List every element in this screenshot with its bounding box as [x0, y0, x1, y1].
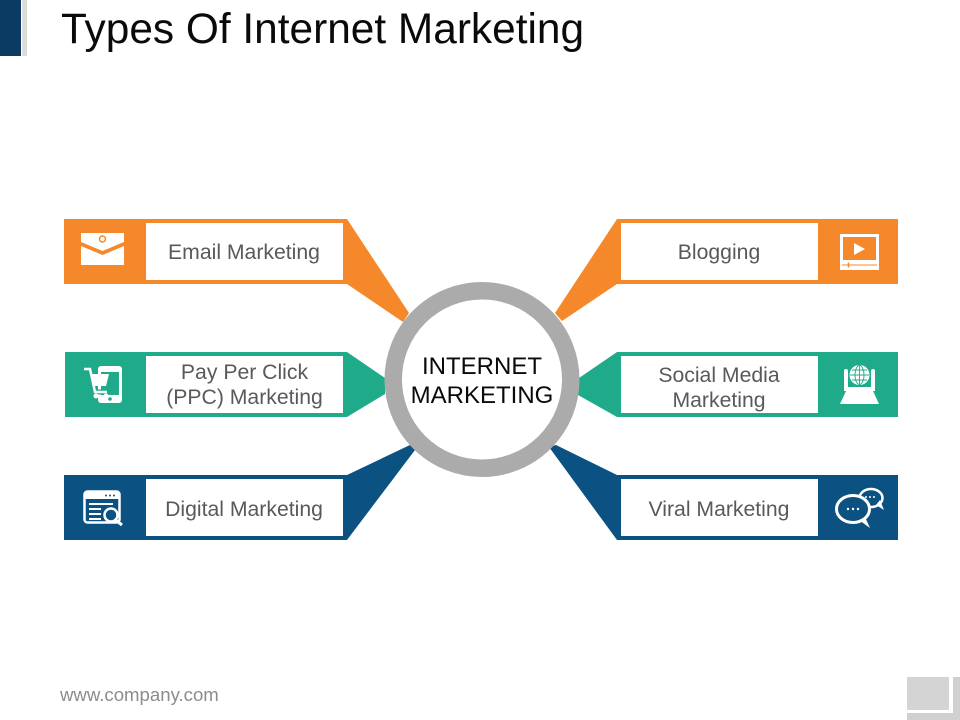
label: email marketing: Email Marketing — [168, 241, 320, 264]
label: digital marketing: Digital Marketing — [165, 498, 323, 521]
central circle: MARKETING — [411, 382, 553, 409]
label: social media marketing: Social Media — [658, 364, 780, 387]
label: blogging: Blogging — [678, 241, 760, 264]
label: pay per click: Pay Per Click — [181, 361, 308, 384]
panel: pay per click — [65, 352, 385, 417]
footer page box — [905, 673, 960, 720]
label: viral marketing: Viral Marketing — [649, 498, 789, 521]
footer url: www.company.com — [59, 684, 219, 705]
icon: speech bubbles — [836, 489, 884, 528]
icon: cart and phone — [84, 366, 122, 403]
title: Types Of Internet Marketing — [61, 5, 584, 52]
central circle — [393, 291, 571, 468]
icon: search document — [84, 492, 122, 525]
panel: blogging — [555, 219, 898, 321]
panel: social media marketing: Marketing — [672, 389, 766, 412]
panel: digital marketing — [64, 445, 415, 540]
icon: email envelope — [81, 233, 124, 265]
panel: email marketing — [64, 219, 409, 322]
header accent — [0, 0, 27, 56]
panel: social media marketing — [578, 352, 898, 417]
icon: video player — [840, 234, 879, 270]
icon: globe webcam — [840, 365, 879, 404]
center label: INTERNET — [422, 353, 542, 380]
panel: viral marketing — [549, 445, 898, 540]
panel: pay per click: (PPC) Marketing — [166, 386, 323, 409]
